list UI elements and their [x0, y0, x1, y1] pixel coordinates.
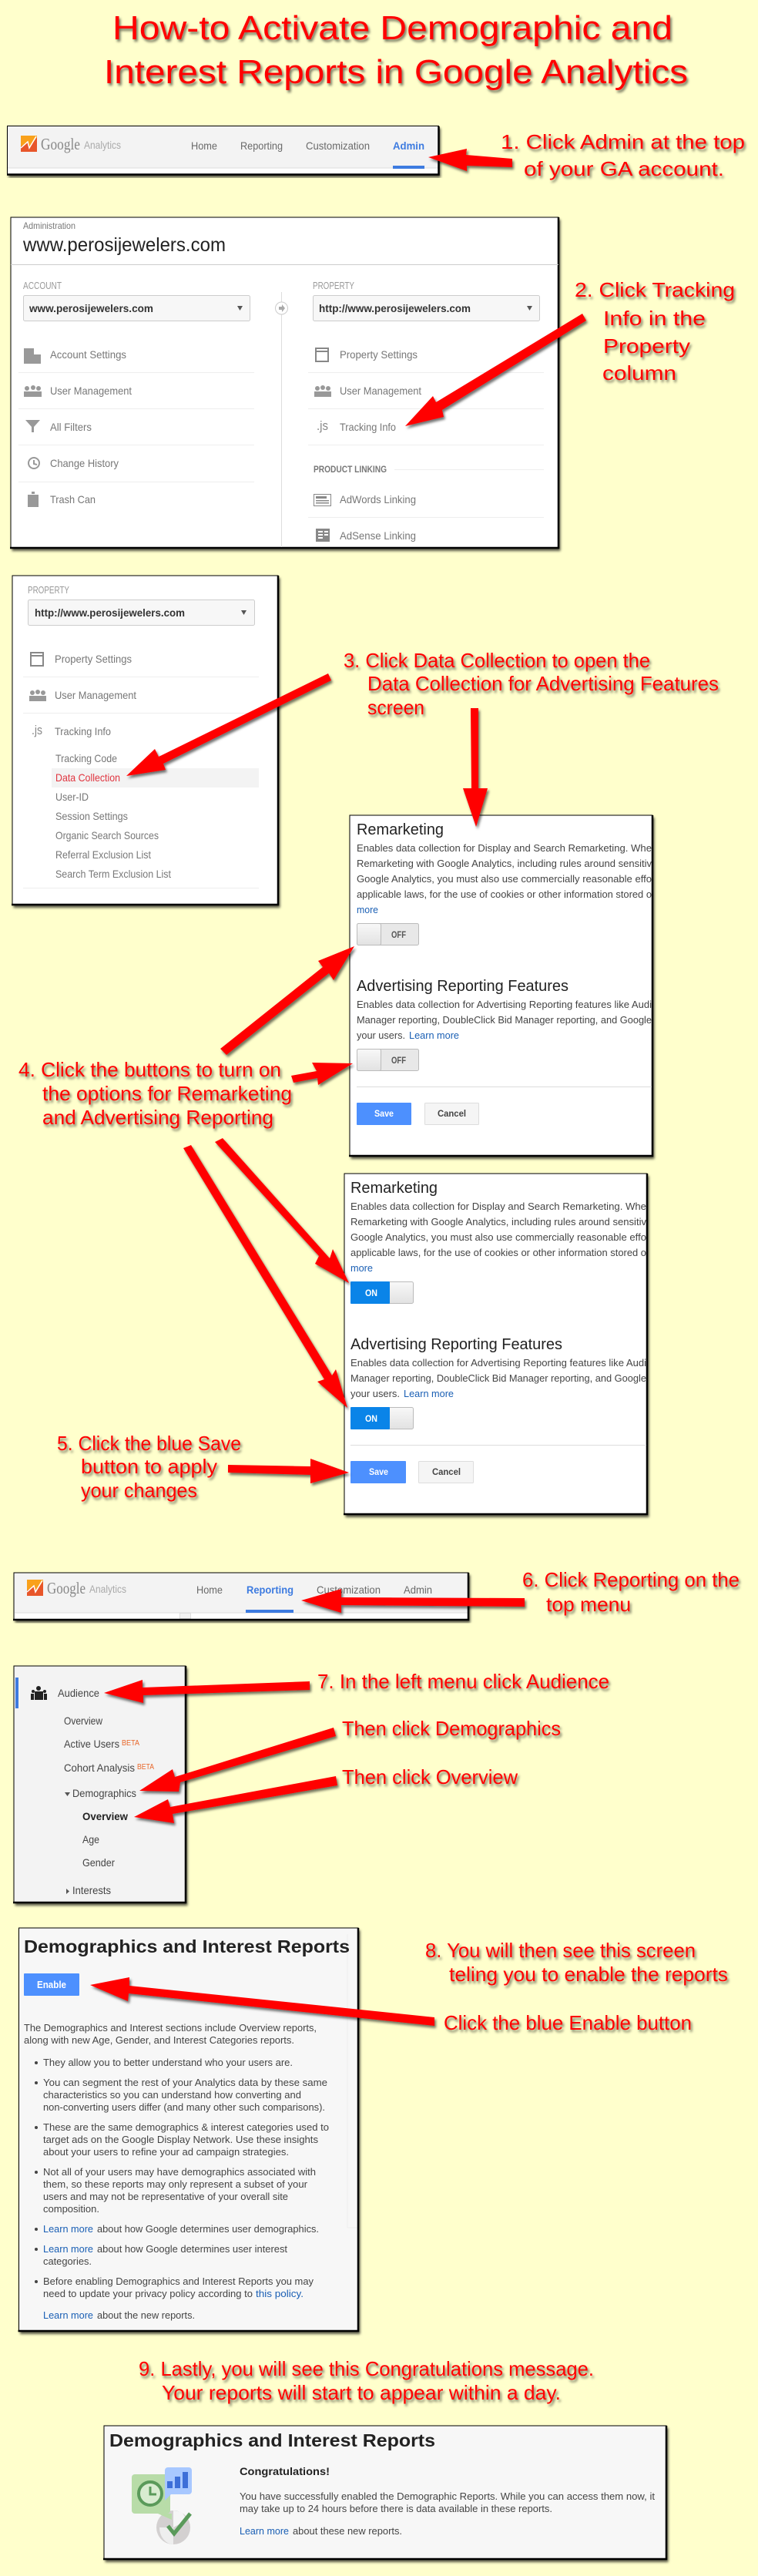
icon: adsense — [316, 529, 330, 542]
title: How-to Activate Demographic and — [112, 9, 672, 47]
cancel button: Cancel — [432, 1466, 461, 1477]
admin header: www.perosijewelers.com — [22, 234, 226, 256]
bullets: target ads on the Google Display Network. Use these insights — [43, 2134, 318, 2145]
panel: left menu — [13, 1666, 186, 1903]
step 4 text — [18, 1058, 292, 1129]
step 6 text: top menu — [546, 1593, 631, 1616]
advertising section: Manager reporting, DoubleClick Bid Manager reporting, and Google — [357, 1014, 652, 1026]
icon: trash — [28, 492, 39, 507]
toggle on: ON — [365, 1288, 377, 1298]
panel: congratulations — [103, 2426, 666, 2559]
icon: filter — [25, 420, 40, 432]
arrow: step 4 to second off toggle — [291, 1063, 353, 1085]
save button: Save — [369, 1466, 388, 1477]
step 9 text: 9. Lastly, you will see this Congratulations message. — [139, 2357, 594, 2380]
title: Interest Reports in Google Analytics — [104, 53, 688, 91]
step 5 text: 5. Click the blue Save — [57, 1432, 241, 1455]
bullets: Learn more — [43, 2309, 93, 2321]
step 8 text: 8. You will then see this screen — [425, 1939, 696, 1962]
arrow: step 3 down to panel — [463, 708, 488, 827]
toggle on: ON — [365, 1413, 377, 1424]
step 9 text: Your reports will start to appear within a day. — [162, 2381, 561, 2404]
admin background — [11, 217, 558, 548]
icon: building — [24, 348, 41, 364]
step 4 text: 4. Click the buttons to turn on — [18, 1058, 281, 1081]
off panel background — [350, 815, 652, 1156]
remarketing section — [357, 821, 652, 945]
account column: All Filters — [50, 421, 92, 433]
panel: Property menu: User Management — [55, 689, 136, 701]
menu items: BETA — [137, 1763, 154, 1772]
bullets: non-converting users differ (and many other such comparisons). — [43, 2101, 325, 2113]
bullets: about how Google determines user interest — [97, 2243, 287, 2255]
panel: Property menu: Search Term Exclusion List — [55, 868, 171, 880]
icon: users — [24, 385, 42, 397]
step 8 text: Click the blue Enable button — [444, 2011, 692, 2034]
enable button: Enable — [37, 1979, 66, 1990]
property selector: http://www.perosijewelers.com — [35, 606, 185, 619]
bullets: categories. — [43, 2255, 92, 2267]
remarketing section: Enables data collection for Display and Search Remarketing. Whe — [357, 842, 652, 854]
step 3 text: Data Collection for Advertising Features — [367, 672, 719, 695]
icon: property — [316, 348, 328, 361]
property column: PRODUCT LINKING — [314, 464, 387, 475]
bullets: Learn more — [43, 2243, 93, 2255]
icon: js: .js — [32, 723, 42, 737]
arrow: to demographics — [139, 1728, 336, 1792]
arrow: step 7 to audience — [104, 1680, 310, 1703]
congratulations message: Learn more — [240, 2525, 289, 2537]
remarketing section: Remarketing with Google Analytics, including rules around sensitiv — [350, 1216, 647, 1228]
remarketing section: more — [357, 904, 378, 915]
on panel background — [344, 1174, 647, 1514]
nav items — [196, 1584, 432, 1596]
menu background — [14, 1666, 186, 1903]
bullets: this policy. — [256, 2288, 304, 2299]
panel: Property menu: Referral Exclusion List — [55, 848, 151, 861]
save button — [357, 1103, 411, 1125]
remarketing section: Remarketing — [350, 1180, 438, 1197]
column switch icon — [276, 302, 288, 314]
advertising section: Advertising Reporting Features — [350, 1336, 562, 1353]
step 7 text — [317, 1670, 609, 1788]
title — [104, 9, 688, 91]
icon: audience — [31, 1686, 47, 1700]
bullets: You can segment the rest of your Analytics data by these same — [43, 2077, 327, 2088]
step 8 text: teling you to enable the reports — [449, 1963, 728, 1986]
remarketing section: Remarketing with Google Analytics, including rules around sensitiv — [357, 858, 652, 869]
bullets: about how Google determines user demographics. — [97, 2223, 319, 2235]
panel: enable reports — [18, 1928, 358, 2331]
property column — [308, 280, 544, 542]
bullets: composition. — [43, 2203, 99, 2215]
intro text: along with new Age, Gender, and Interest Categories reports. — [24, 2034, 294, 2046]
nav items — [191, 139, 424, 152]
congratulations message: Congratulations! — [240, 2465, 330, 2477]
bullets: Before enabling Demographics and Interest Reports you may — [43, 2275, 314, 2287]
step 2 text — [575, 278, 735, 385]
congratulations message — [240, 2465, 655, 2537]
icon: users — [314, 385, 331, 397]
arrow: step 3 to data collection — [126, 673, 331, 776]
step 6 text — [522, 1568, 740, 1616]
remarketing section: Enables data collection for Display and Search Remarketing. Whe — [350, 1201, 646, 1212]
advertising section: your users. — [350, 1388, 400, 1399]
property selector: PROPERTY — [28, 584, 69, 596]
toggle off — [357, 923, 419, 945]
bullets: These are the same demographics & interest categories used to — [43, 2121, 329, 2133]
enable button — [24, 1973, 79, 1996]
property column: Tracking Info — [340, 421, 396, 433]
property column: User Management — [340, 385, 421, 397]
advertising section — [350, 1336, 646, 1429]
advertising section: Enables data collection for Advertising Reporting features like Audi — [350, 1357, 646, 1369]
arrow: step 4 to first on toggle — [215, 1138, 349, 1283]
menu items: Age — [82, 1833, 99, 1846]
arrow: step 1 — [428, 149, 512, 171]
menu items: Audience — [58, 1687, 99, 1699]
menu items: Cohort Analysis — [64, 1762, 135, 1774]
icon: users — [29, 690, 46, 701]
advertising section: your users. — [357, 1029, 405, 1041]
congratulations message: You have successfully enabled the Demographic Reports. While you can access them now, it — [240, 2490, 655, 2502]
remarketing section: Google Analytics, you must also use commercially reasonable effo — [357, 873, 652, 885]
menu items: Active Users — [64, 1738, 119, 1750]
step 3 text — [344, 649, 719, 719]
step 7 text: Then click Overview — [342, 1765, 518, 1788]
icon: adwords — [314, 495, 331, 505]
step 4 text: the options for Remarketing — [42, 1082, 292, 1105]
panel: Property menu — [12, 576, 278, 905]
bullets: They allow you to better understand who your users are. — [43, 2057, 293, 2068]
save button — [350, 1461, 406, 1483]
icon: property — [31, 653, 43, 666]
active tab bar — [393, 166, 424, 169]
step 3 text: screen — [367, 696, 424, 719]
arrow: step 4 to second on toggle — [183, 1145, 347, 1408]
nav items: Customization — [317, 1584, 381, 1596]
property column: Property Settings — [340, 348, 418, 361]
logo text: Google — [41, 135, 80, 153]
menu items: Demographics — [72, 1787, 136, 1799]
step 9 text — [139, 2357, 594, 2404]
bullets: need to update your privacy policy according to — [43, 2288, 253, 2299]
panel: data collection ON — [344, 1174, 647, 1514]
enable heading: Demographics and Interest Reports — [24, 1936, 350, 1956]
bullets: users and may not be representative of your overall site — [43, 2191, 288, 2202]
logo text — [41, 135, 121, 153]
bullets: about your users to refine your ad campaign strategies. — [43, 2146, 289, 2158]
admin header — [11, 220, 558, 265]
advertising section — [357, 978, 652, 1071]
logo text: Analytics — [84, 139, 121, 151]
property column: http://www.perosijewelers.com — [319, 302, 471, 314]
menu items: Gender — [82, 1856, 115, 1869]
cancel button — [419, 1461, 473, 1483]
nav items: Admin — [404, 1584, 432, 1596]
step 7 text: Then click Demographics — [342, 1717, 561, 1740]
step 8 text — [425, 1939, 728, 2034]
step 1 text — [501, 130, 745, 180]
congratulations message: about these new reports. — [293, 2525, 402, 2537]
step 1 text: of your GA account. — [524, 157, 724, 180]
panel: Property menu: Tracking Info — [55, 725, 111, 737]
panel: Property menu: Organic Search Sources — [55, 829, 159, 841]
arrow: step 2 — [405, 314, 586, 426]
toggle on — [350, 1407, 413, 1429]
panel: data collection OFF — [349, 815, 652, 1156]
logo text: Google — [47, 1579, 86, 1597]
congratulations background — [104, 2426, 666, 2559]
step 7 text: 7. In the left menu click Audience — [317, 1670, 609, 1693]
step 4 text: and Advertising Reporting — [42, 1106, 273, 1129]
remarketing section: Google Analytics, you must also use commercially reasonable effo — [350, 1231, 646, 1243]
remarketing section: applicable laws, for the use of cookies or other information stored o — [350, 1247, 646, 1258]
nav items: Reporting — [240, 139, 283, 152]
advertising section: Learn more — [409, 1029, 459, 1041]
admin header: Administration — [23, 220, 75, 231]
account column: www.perosijewelers.com — [29, 302, 153, 314]
panel: Property menu: User-ID — [55, 791, 89, 803]
panel: Property menu: Session Settings — [55, 810, 128, 822]
congratulations message: may take up to 24 hours before there is data available in these reports. — [240, 2503, 552, 2514]
step 6 text: 6. Click Reporting on the — [522, 1568, 740, 1591]
enable background — [18, 1928, 358, 2331]
panel: Google Analytics nav, Admin — [7, 126, 439, 174]
account column — [18, 280, 254, 507]
intro text: The Demographics and Interest sections include Overview reports, — [24, 2022, 317, 2034]
step 5 text: button to apply — [81, 1455, 217, 1478]
bullets — [35, 2057, 329, 2321]
step 2 text: Info in the — [603, 307, 706, 330]
step 2 text: column — [602, 361, 676, 385]
menu items: BETA — [122, 1739, 139, 1748]
nav background — [14, 1573, 468, 1620]
menu items: Overview — [64, 1715, 103, 1727]
property selector — [28, 584, 254, 626]
nav items: Reporting — [247, 1584, 293, 1596]
arrow: step 6 — [301, 1589, 525, 1613]
nav items: Home — [191, 139, 217, 152]
save button: Save — [374, 1108, 394, 1119]
panel: Google Analytics nav, Reporting — [13, 1573, 468, 1620]
remarketing section — [350, 1180, 647, 1304]
remarketing section: more — [350, 1262, 373, 1274]
bullets: Learn more — [43, 2223, 93, 2235]
step 2 text: 2. Click Tracking — [575, 278, 735, 301]
remarketing section: Remarketing — [357, 821, 444, 838]
nav items: Admin — [393, 139, 424, 152]
step 5 text: your changes — [81, 1479, 197, 1502]
toggle off: OFF — [391, 929, 406, 940]
advertising section: Advertising Reporting Features — [357, 978, 568, 995]
menu items: Overview — [82, 1810, 128, 1822]
arrow: step 5 to save — [228, 1459, 349, 1483]
panel: Administration — [10, 217, 558, 548]
nav background — [8, 126, 439, 174]
menu items: Interests — [72, 1884, 111, 1896]
cancel button — [425, 1103, 479, 1125]
step 3 text: 3. Click Data Collection to open the — [344, 649, 650, 672]
arrow: step 8 to enable — [90, 1977, 434, 2026]
advertising section: Learn more — [404, 1388, 454, 1399]
step 5 text — [57, 1432, 241, 1502]
step 2 text: Property — [603, 334, 690, 358]
highlighted data collection row: Data Collection — [55, 771, 120, 784]
cancel button: Cancel — [438, 1108, 466, 1119]
account column: Account Settings — [50, 348, 126, 361]
property column: PROPERTY — [313, 280, 354, 291]
bullets: Not all of your users may have demographics associated with — [43, 2166, 316, 2178]
account column: ACCOUNT — [23, 280, 62, 291]
bullets: about the new reports. — [97, 2309, 195, 2321]
logo text — [47, 1579, 126, 1597]
nav items: Home — [196, 1584, 223, 1596]
menu items — [58, 1687, 154, 1896]
nav items: Customization — [306, 139, 370, 152]
account column: Trash Can — [50, 493, 96, 505]
property background — [12, 576, 278, 905]
congratulations heading: Demographics and Interest Reports — [109, 2430, 435, 2450]
panel: Property menu: Property Settings — [55, 653, 132, 665]
bullets: characteristics so you can understand how converting and — [43, 2089, 301, 2101]
icon: history — [29, 458, 39, 469]
highlighted data collection row — [52, 768, 259, 788]
panel: Property menu: Tracking Code — [55, 752, 117, 764]
property column: AdSense Linking — [340, 529, 416, 542]
icon: js: .js — [317, 418, 328, 433]
icon: analytics logo — [27, 1580, 43, 1596]
icon: analytics logo — [21, 136, 37, 152]
remarketing section: applicable laws, for the use of cookies or other information stored o — [357, 888, 652, 900]
arrow: step 4 to first off toggle — [220, 946, 354, 1055]
advertising section: Enables data collection for Advertising Reporting features like Audi — [357, 999, 652, 1010]
logo text: Analytics — [89, 1583, 126, 1595]
account column: Change History — [50, 457, 119, 469]
toggle off: OFF — [391, 1055, 406, 1066]
icon: report bubbles and check — [132, 2467, 192, 2544]
property column: AdWords Linking — [340, 493, 416, 505]
bullets: them, so these reports may only represent a subset of your — [43, 2178, 308, 2190]
active tab bar — [246, 1610, 293, 1613]
toggle on — [350, 1281, 413, 1304]
toggle off — [357, 1050, 419, 1071]
intro text — [24, 2022, 317, 2046]
arrow: to overview — [134, 1776, 337, 1823]
step 1 text: 1. Click Admin at the top — [501, 130, 745, 153]
advertising section: Manager reporting, DoubleClick Bid Manager reporting, and Google — [350, 1372, 646, 1384]
account column: User Management — [50, 385, 132, 397]
